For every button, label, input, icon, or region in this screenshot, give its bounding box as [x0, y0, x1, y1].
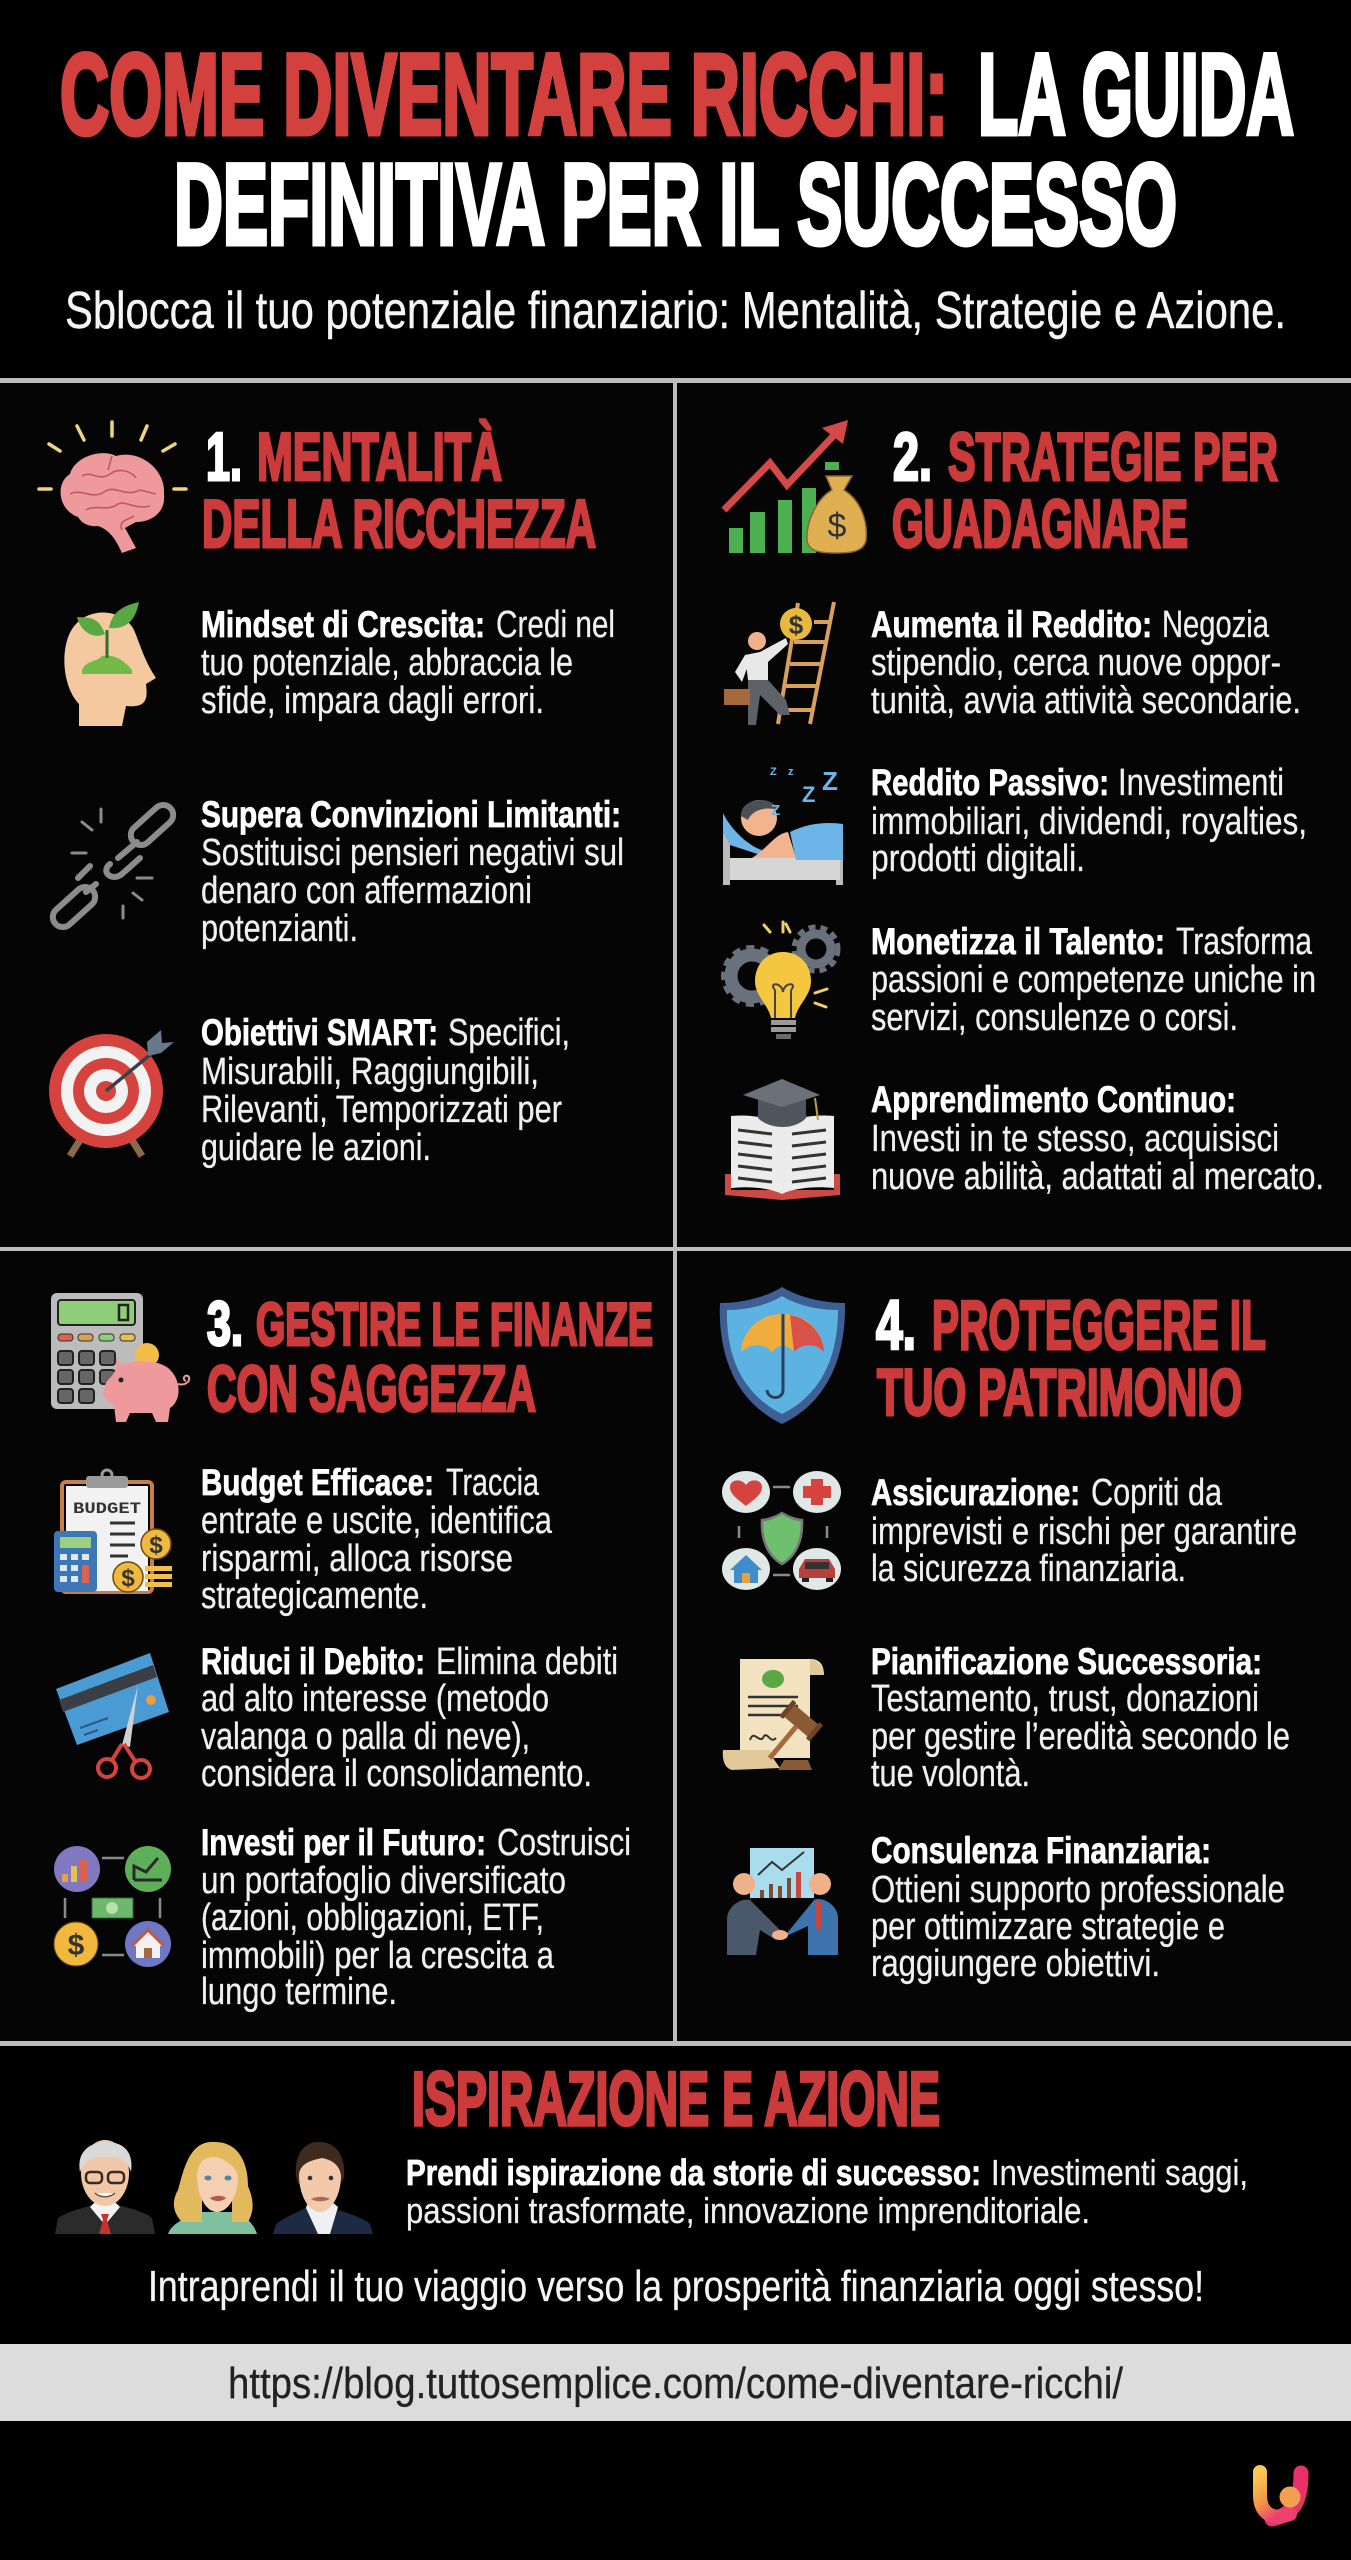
text: reddito passivo: Investimenti	[1118, 762, 1284, 804]
text: budget efficace	[201, 1462, 553, 1617]
text: obiettivi smart: Specifici,	[448, 1012, 570, 1054]
heading: 1. Mentalità della ricchezza: MENTALITÀ	[257, 419, 502, 495]
text: supera convinzioni limitanti: Supera Convinzioni Limitanti:	[201, 794, 621, 835]
icon: budget clipboard: $	[149, 1532, 163, 1559]
text: apprendimento continuo	[871, 1079, 1324, 1198]
text: monetizza il talento: servizi, consulenze o corsi.	[871, 997, 1238, 1039]
icon: credit card and scissors	[56, 1653, 169, 1778]
icon: portrait of blonde woman	[168, 2142, 257, 2234]
text: obiettivi smart	[201, 1012, 570, 1169]
text: obiettivi smart: Obiettivi SMART:	[201, 1012, 438, 1053]
text: assicurazione: Copriti da	[1091, 1472, 1223, 1514]
icon: head with plant	[64, 602, 156, 726]
text: aumenta il reddito: Negozia	[1162, 604, 1270, 646]
icon: climber on ladder: $	[789, 610, 804, 640]
text: budget efficace: risparmi, alloca risorse	[201, 1538, 513, 1580]
panel: 4. proteggere il tuo patrimonio	[720, 1286, 1297, 1985]
text: riduci il debito: ad alto interesse (metodo	[201, 1678, 549, 1720]
text: budget efficace: Budget Efficace:	[201, 1462, 434, 1503]
text: riduci il debito: Elimina debiti	[436, 1641, 618, 1683]
heading: 3. Gestire le finanze con saggezza: GESTIRE LE FINANZE	[256, 1291, 653, 1358]
heading: 1. Mentalità della ricchezza	[202, 419, 596, 562]
heading: 1. Mentalità della ricchezza: 1.	[206, 419, 242, 495]
text: reddito passivo: Reddito Passivo:	[871, 762, 1109, 803]
heading: 1. Mentalità della ricchezza: DELLA RICCHEZZA	[202, 486, 596, 562]
heading: 3. Gestire le finanze con saggezza: CON SAGGEZZA	[207, 1352, 536, 1425]
panel: 1. mentalità della ricchezza	[39, 419, 624, 1169]
panel: ispirazione e azione	[55, 2057, 1248, 2311]
text: investi per il futuro: immobili) per la crescita a	[201, 1935, 555, 1977]
icon: calculator and piggy bank	[51, 1293, 189, 1422]
text: monetizza il talento: Monetizza il Talento:	[871, 921, 1165, 962]
text: mindset di crescita: sfide, impara dagli errori.	[201, 680, 544, 722]
text: riduci il debito: valanga o palla di neve),	[201, 1716, 530, 1758]
text: consulenza finanziaria: raggiungere obiettivi.	[871, 1943, 1160, 1985]
text: supera convinzioni limitanti: Sostituisci pensieri negativi sul	[201, 832, 624, 874]
icon: person sleeping	[723, 766, 843, 885]
text: investi per il futuro	[201, 1822, 631, 2013]
icon: target with arrow	[49, 1030, 174, 1156]
text: investi per il futuro: (azioni, obbligazioni, ETF,	[201, 1897, 544, 1939]
heading: 4. Proteggere il tuo patrimonio: 4.	[876, 1286, 916, 1364]
icon: gears and light bulb	[724, 922, 838, 1039]
icon: book with graduation cap	[725, 1079, 840, 1200]
text: mindset di crescita: Mindset di Crescita:	[201, 604, 485, 645]
text: investi per il futuro: lungo termine.	[201, 1971, 397, 2013]
text: pianificazione successoria: Pianificazione Successoria:	[871, 1641, 1262, 1682]
text: riduci il debito	[201, 1641, 618, 1795]
icon: broken chain	[49, 801, 177, 931]
url bar	[0, 2344, 1351, 2421]
icon: person sleeping: Z	[802, 782, 815, 807]
text: apprendimento continuo: Apprendimento Continuo:	[871, 1079, 1236, 1120]
icon: logo	[1260, 2472, 1301, 2519]
text: aumenta il reddito: Aumenta il Reddito:	[871, 604, 1152, 645]
text: storie di successo: passioni trasformate, innovazione imprenditoriale.	[406, 2190, 1090, 2231]
text: supera convinzioni limitanti: potenzianti.	[201, 908, 358, 950]
icon: portrait of dark-haired man	[273, 2142, 373, 2234]
text: investi per il futuro: Investi per il Futuro:	[201, 1822, 486, 1863]
text: storie di successo: Prendi ispirazione da storie di successo:	[406, 2152, 981, 2193]
text: riduci il debito: Riduci il Debito:	[201, 1641, 425, 1682]
text: pianificazione successoria	[871, 1641, 1290, 1795]
text: assicurazione: la sicurezza finanziaria.	[871, 1548, 1186, 1590]
text: pianificazione successoria: Testamento, trust, donazioni	[871, 1678, 1259, 1720]
text: mindset di crescita	[201, 604, 615, 722]
text: aumenta il reddito	[871, 604, 1301, 722]
text: storie di successo: Investimenti saggi,	[991, 2152, 1248, 2193]
text: pianificazione successoria: tue volontà.	[871, 1753, 1030, 1795]
text: obiettivi smart: Rilevanti, Temporizzati per	[201, 1089, 562, 1131]
icon: insurance types	[722, 1471, 841, 1590]
text: obiettivi smart: Misurabili, Raggiungibili,	[201, 1051, 539, 1093]
icon: person sleeping: Z	[771, 802, 780, 819]
text: investi per il futuro: Costruisci	[497, 1822, 631, 1864]
icon: climber on ladder	[724, 602, 834, 725]
heading: 2. Strategie per guadagnare	[892, 419, 1278, 562]
text: storie di successo	[406, 2152, 1248, 2231]
text: consulenza finanziaria	[871, 1830, 1285, 1985]
icon: brain	[39, 422, 186, 553]
text: supera convinzioni limitanti: denaro con affermazioni	[201, 870, 532, 912]
text: consulenza finanziaria: Consulenza Finanziaria:	[871, 1830, 1211, 1871]
heading: 4. Proteggere il tuo patrimonio	[876, 1286, 1266, 1429]
heading: ispirazione e azione: ISPIRAZIONE E AZIONE	[412, 2057, 940, 2142]
text: reddito passivo: prodotti digitali.	[871, 838, 1085, 880]
title	[60, 31, 1294, 269]
text: assicurazione: Assicurazione:	[871, 1472, 1080, 1513]
text: reddito passivo	[871, 762, 1307, 880]
text: supera convinzioni limitanti	[201, 794, 624, 950]
text: monetizza il talento	[871, 921, 1316, 1039]
heading: 3. Gestire le finanze con saggezza: 3.	[207, 1290, 243, 1359]
url bar: https://blog.tuttosemplice.com/come-diventare-ricchi/	[228, 2359, 1124, 2408]
text: budget efficace: Traccia	[446, 1462, 540, 1504]
icon: person sleeping: z	[788, 766, 794, 778]
icon: financial advisor handshake	[727, 1848, 838, 1955]
icon: portrait of older man with glasses	[55, 2140, 155, 2234]
icon: shield with umbrella	[720, 1287, 845, 1424]
panel: 2. strategie per guadagnare	[723, 419, 1324, 1200]
icon: person sleeping: Z	[822, 766, 838, 796]
icon: will and gavel	[723, 1659, 824, 1771]
icon: diversified portfolio: $	[68, 1929, 85, 1962]
icon: growth chart and money bag: $	[828, 507, 847, 545]
icon: budget clipboard: BUDGET	[73, 1500, 141, 1518]
heading: 2. Strategie per guadagnare: 2.	[893, 419, 932, 495]
icon: budget clipboard: $	[121, 1565, 135, 1592]
text: consulenza finanziaria: per ottimizzare strategie e	[871, 1906, 1225, 1948]
text: mindset di crescita: Credi nel	[496, 604, 615, 646]
text: riduci il debito: considera il consolidamento.	[201, 1753, 592, 1795]
text: budget efficace: entrate e uscite, identifica	[201, 1500, 553, 1542]
text: monetizza il talento: Trasforma	[1176, 921, 1313, 963]
icon: growth chart and money bag	[724, 420, 866, 553]
text: mindset di crescita: tuo potenziale, abbraccia le	[201, 642, 573, 684]
panel: 3. gestire le finanze con saggezza	[51, 1290, 653, 2013]
heading: 3. Gestire le finanze con saggezza	[207, 1290, 653, 1425]
text: obiettivi smart: guidare le azioni.	[201, 1127, 431, 1169]
icon: diversified portfolio	[54, 1846, 171, 1967]
text: investi per il futuro: un portafoglio diversificato	[201, 1860, 566, 1902]
text: budget efficace: strategicamente.	[201, 1575, 428, 1617]
text: assicurazione	[871, 1472, 1297, 1590]
icon: person sleeping: Z	[770, 766, 777, 778]
icon: budget clipboard	[54, 1470, 172, 1592]
